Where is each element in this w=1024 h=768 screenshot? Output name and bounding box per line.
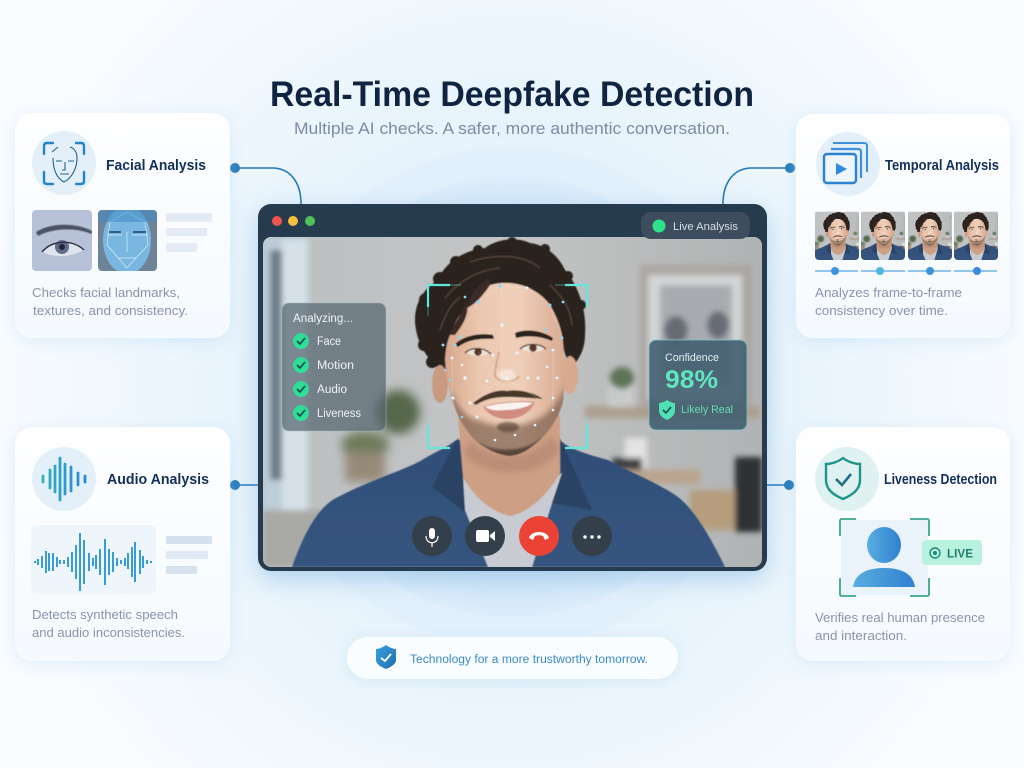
description: liveness detection: and interaction. (815, 629, 907, 643)
icon: shield (659, 400, 675, 420)
heading: audio analysis: Audio Analysis (107, 472, 209, 488)
panel: confidence score: Confidence (665, 352, 719, 364)
description: audio analysis (32, 608, 185, 640)
description: audio analysis: Detects synthetic speech (32, 608, 178, 622)
call controls (412, 516, 612, 556)
image: eye close-up (32, 210, 92, 271)
title: Real-Time Deepfake Detection (270, 75, 754, 114)
description: facial analysis: Checks facial landmarks, (32, 286, 180, 300)
description: temporal analysis: consistency over time. (815, 304, 948, 318)
panel: temporal analysis (796, 114, 1016, 338)
connector: facial analysis (230, 163, 301, 204)
description: audio analysis: and audio inconsistencies. (32, 626, 185, 640)
placeholder bars (166, 536, 212, 574)
description: liveness detection: Verifies real human presence (815, 611, 985, 625)
badge: live: LIVE (947, 546, 973, 560)
chart: audio waveform (31, 525, 156, 594)
icon: video frames (816, 132, 880, 196)
icon: shield check (815, 447, 879, 511)
panel: liveness detection (796, 427, 1010, 661)
image: face mesh (98, 210, 157, 271)
placeholder bars (166, 213, 212, 252)
description: facial analysis (32, 286, 188, 318)
button: end call (519, 516, 559, 556)
heading: facial analysis: Facial Analysis (106, 158, 206, 174)
button: more (572, 516, 612, 556)
panel: confidence score: 98% (665, 366, 718, 394)
icon: waveform (32, 447, 96, 511)
video feed: man on call (263, 237, 762, 567)
check: liveness: Liveness (317, 408, 361, 420)
panel: analyzing checklist (282, 303, 386, 431)
heading: liveness detection: Liveness Detection (884, 472, 997, 488)
description: temporal analysis (815, 286, 962, 318)
check: motion: Motion (317, 360, 354, 372)
panel: audio analysis (15, 427, 230, 661)
description: facial analysis: textures, and consistency. (33, 304, 188, 318)
face landmark mesh (442, 284, 564, 441)
check: face: Face (317, 336, 341, 348)
icon: shield (376, 645, 396, 669)
panel: analyzing checklist: Analyzing... (293, 313, 353, 325)
badge: live analysis (641, 212, 750, 239)
panel: facial analysis (15, 113, 230, 338)
description: temporal analysis: Analyzes frame-to-frame (815, 286, 962, 300)
panel: confidence score: Likely Real (681, 404, 733, 416)
video call window (258, 204, 767, 571)
window controls (272, 216, 315, 226)
heading: temporal analysis: Temporal Analysis (885, 158, 999, 174)
image strip: video frames (815, 212, 998, 260)
tagline pill: Technology for a more trustworthy tomorrow. (410, 654, 648, 666)
connector: temporal analysis (723, 163, 795, 204)
timeline (815, 267, 997, 275)
check: audio: Audio (317, 384, 347, 396)
badge: live (922, 540, 982, 565)
button: camera (465, 516, 505, 556)
badge: live analysis: Live Analysis (673, 221, 739, 233)
image: live person frame (840, 519, 929, 596)
icon: face scan (32, 131, 96, 195)
button: microphone (412, 516, 452, 556)
description: liveness detection (815, 611, 985, 643)
face detection brackets (428, 285, 587, 448)
subtitle: Multiple AI checks. A safer, more authentic conversation. (294, 120, 730, 138)
tagline pill (347, 637, 678, 679)
panel: confidence score (649, 340, 747, 430)
connector: audio analysis (230, 480, 260, 490)
connector: liveness detection (765, 480, 794, 490)
